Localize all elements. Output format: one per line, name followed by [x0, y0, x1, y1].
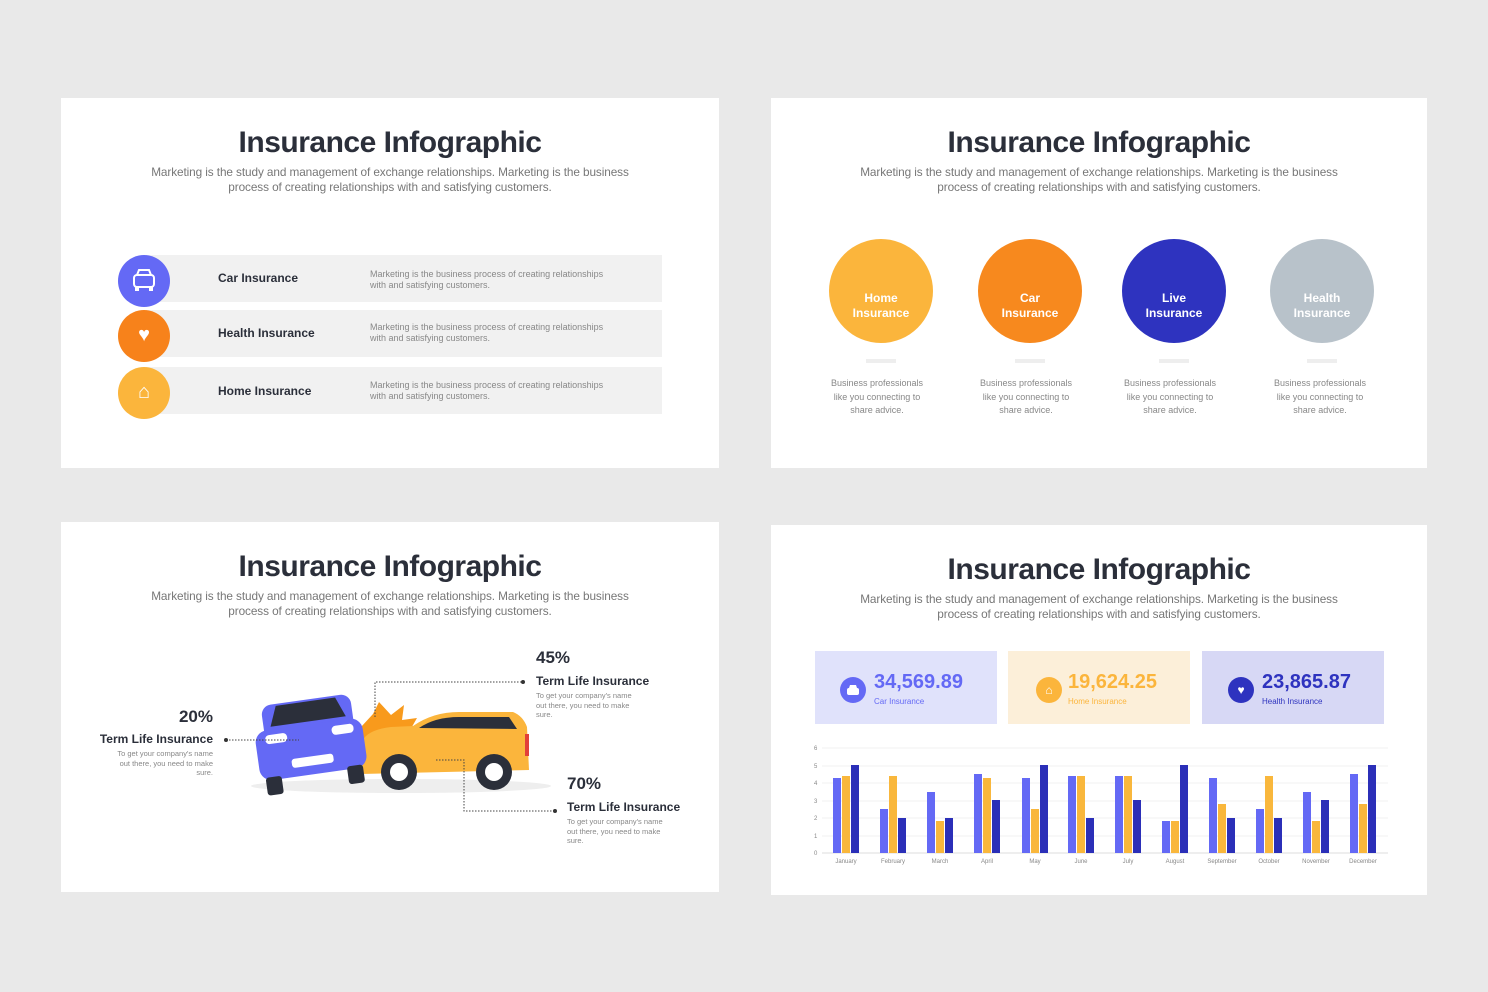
- panel: list: [61, 98, 719, 468]
- item: car insurance: Car: [1020, 291, 1040, 305]
- item: live insurance: share advice.: [1143, 405, 1197, 415]
- bar chart: March: [932, 859, 948, 865]
- label 20%: out there, you need to make: [120, 758, 213, 768]
- subtitle: Marketing is the study and management of exchange relationships. Marketing is the business: [860, 592, 1338, 606]
- card: car insurance: 34,569.89: [874, 671, 963, 693]
- label 70%: sure.: [567, 836, 584, 845]
- subtitle: Marketing is the study and management of exchange relationships. Marketing is the business: [151, 165, 629, 179]
- row: home insurance: with and satisfying customers.: [370, 391, 490, 401]
- item: health insurance: Business professionals: [1274, 378, 1366, 388]
- item: home insurance: Business professionals: [831, 378, 923, 388]
- subtitle: Marketing is the study and management of exchange relationships. Marketing is the business: [860, 165, 1338, 179]
- illustration: car crash: [224, 680, 557, 813]
- panel: circles: [771, 98, 1427, 468]
- bar chart: July: [1123, 859, 1133, 865]
- label 70%: Term Life Insurance: [567, 800, 680, 814]
- subtitle: process of creating relationships with and satisfying customers.: [937, 180, 1261, 194]
- bar chart: June: [1074, 859, 1088, 865]
- card: home insurance: Home Insurance: [1068, 697, 1127, 706]
- card: health insurance: Health Insurance: [1262, 697, 1322, 706]
- card: car insurance: [815, 651, 997, 724]
- label 45%: Term Life Insurance: [536, 674, 649, 688]
- item: home insurance: share advice.: [850, 405, 904, 415]
- label 20%: Term Life Insurance: [100, 732, 213, 746]
- subtitle: process of creating relationships with and satisfying customers.: [228, 180, 552, 194]
- item: car insurance: Business professionals: [980, 378, 1072, 388]
- label 20%: To get your company's name: [117, 749, 213, 758]
- panel: chart: [771, 525, 1427, 895]
- bar chart: February: [881, 859, 905, 865]
- subtitle: [860, 165, 1338, 194]
- subtitle: Marketing is the study and management of exchange relationships. Marketing is the business: [151, 589, 629, 603]
- subtitle: [860, 592, 1338, 621]
- item: live insurance: Live: [1162, 291, 1186, 305]
- label 20%: [100, 707, 213, 777]
- row: car insurance: with and satisfying customers.: [370, 280, 490, 290]
- panel: cars: [61, 522, 719, 892]
- item: health insurance: Insurance: [1294, 306, 1350, 320]
- bar chart: January: [835, 859, 857, 865]
- row: car insurance: Car Insurance: [218, 271, 298, 285]
- subtitle: [151, 165, 629, 194]
- title: Insurance Infographic: [239, 126, 541, 159]
- subtitle: process of creating relationships with and satisfying customers.: [937, 607, 1261, 621]
- title: Insurance Infographic: [239, 550, 541, 583]
- title: Insurance Infographic: [948, 126, 1250, 159]
- row: health insurance: Marketing is the business process of creating relationships: [370, 322, 603, 332]
- bar chart: April: [981, 859, 993, 865]
- item: live insurance: [1122, 239, 1226, 415]
- bar chart: 5: [814, 764, 818, 770]
- row: home insurance: Marketing is the business process of creating relationships: [370, 380, 603, 390]
- item: car insurance: Insurance: [1002, 306, 1058, 320]
- row: car insurance: Marketing is the business process of creating relationships: [370, 269, 603, 279]
- item: home insurance: Home: [864, 291, 898, 305]
- title: Insurance Infographic: [948, 553, 1250, 586]
- item: live insurance: like you connecting to: [1127, 392, 1213, 402]
- subtitle: process of creating relationships with and satisfying customers.: [228, 604, 552, 618]
- card: car insurance: Car Insurance: [874, 697, 924, 706]
- item: live insurance: Business professionals: [1124, 378, 1216, 388]
- row: car insurance: [118, 255, 662, 307]
- item: car insurance: like you connecting to: [983, 392, 1069, 402]
- item: home insurance: [829, 239, 933, 415]
- bar chart: 2: [814, 816, 818, 822]
- item: health insurance: Health: [1304, 291, 1340, 305]
- label 20%: 20%: [179, 707, 213, 726]
- bar chart: 4: [814, 781, 818, 787]
- subtitle: [151, 589, 629, 618]
- label 20%: sure.: [196, 768, 213, 777]
- row: health insurance: [118, 310, 662, 362]
- item: car insurance: share advice.: [999, 405, 1053, 415]
- card: home insurance: [1008, 651, 1190, 724]
- label 45%: To get your company's name: [536, 691, 632, 700]
- bar chart: 3: [814, 799, 818, 805]
- card: home insurance: ⌂: [1045, 683, 1053, 697]
- label 45%: [536, 648, 649, 719]
- label 70%: 70%: [567, 774, 601, 793]
- item: health insurance: share advice.: [1293, 405, 1347, 415]
- card: health insurance: [1202, 651, 1384, 724]
- label 45%: out there, you need to make: [536, 700, 629, 710]
- label 70%: out there, you need to make: [567, 826, 660, 836]
- label 70%: To get your company's name: [567, 817, 663, 826]
- label 45%: sure.: [536, 710, 553, 719]
- bar chart: December: [1349, 859, 1377, 865]
- label 70%: [567, 774, 680, 845]
- bar chart: May: [1029, 859, 1041, 865]
- row: health insurance: ♥: [138, 324, 150, 346]
- item: home insurance: like you connecting to: [834, 392, 920, 402]
- item: live insurance: Insurance: [1146, 306, 1202, 320]
- row: health insurance: Health Insurance: [218, 326, 315, 340]
- bar chart: August: [1166, 859, 1185, 865]
- item: car insurance: [978, 239, 1082, 415]
- row: home insurance: [118, 367, 662, 419]
- card: home insurance: 19,624.25: [1068, 671, 1157, 693]
- label 45%: 45%: [536, 648, 570, 667]
- item: home insurance: Insurance: [853, 306, 909, 320]
- row: home insurance: Home Insurance: [218, 384, 311, 398]
- row: home insurance: ⌂: [138, 381, 150, 403]
- bar chart: October: [1258, 859, 1280, 865]
- card: health insurance: 23,865.87: [1262, 671, 1351, 693]
- bar chart: November: [1302, 859, 1330, 865]
- row: health insurance: with and satisfying customers.: [370, 333, 490, 343]
- item: health insurance: like you connecting to: [1277, 392, 1363, 402]
- item: health insurance: [1270, 239, 1374, 415]
- bar chart: 6: [814, 746, 818, 752]
- bar chart: September: [1207, 859, 1237, 865]
- bar chart: 1: [814, 834, 818, 840]
- bar chart: 0: [814, 851, 818, 857]
- card: health insurance: ♥: [1237, 683, 1245, 697]
